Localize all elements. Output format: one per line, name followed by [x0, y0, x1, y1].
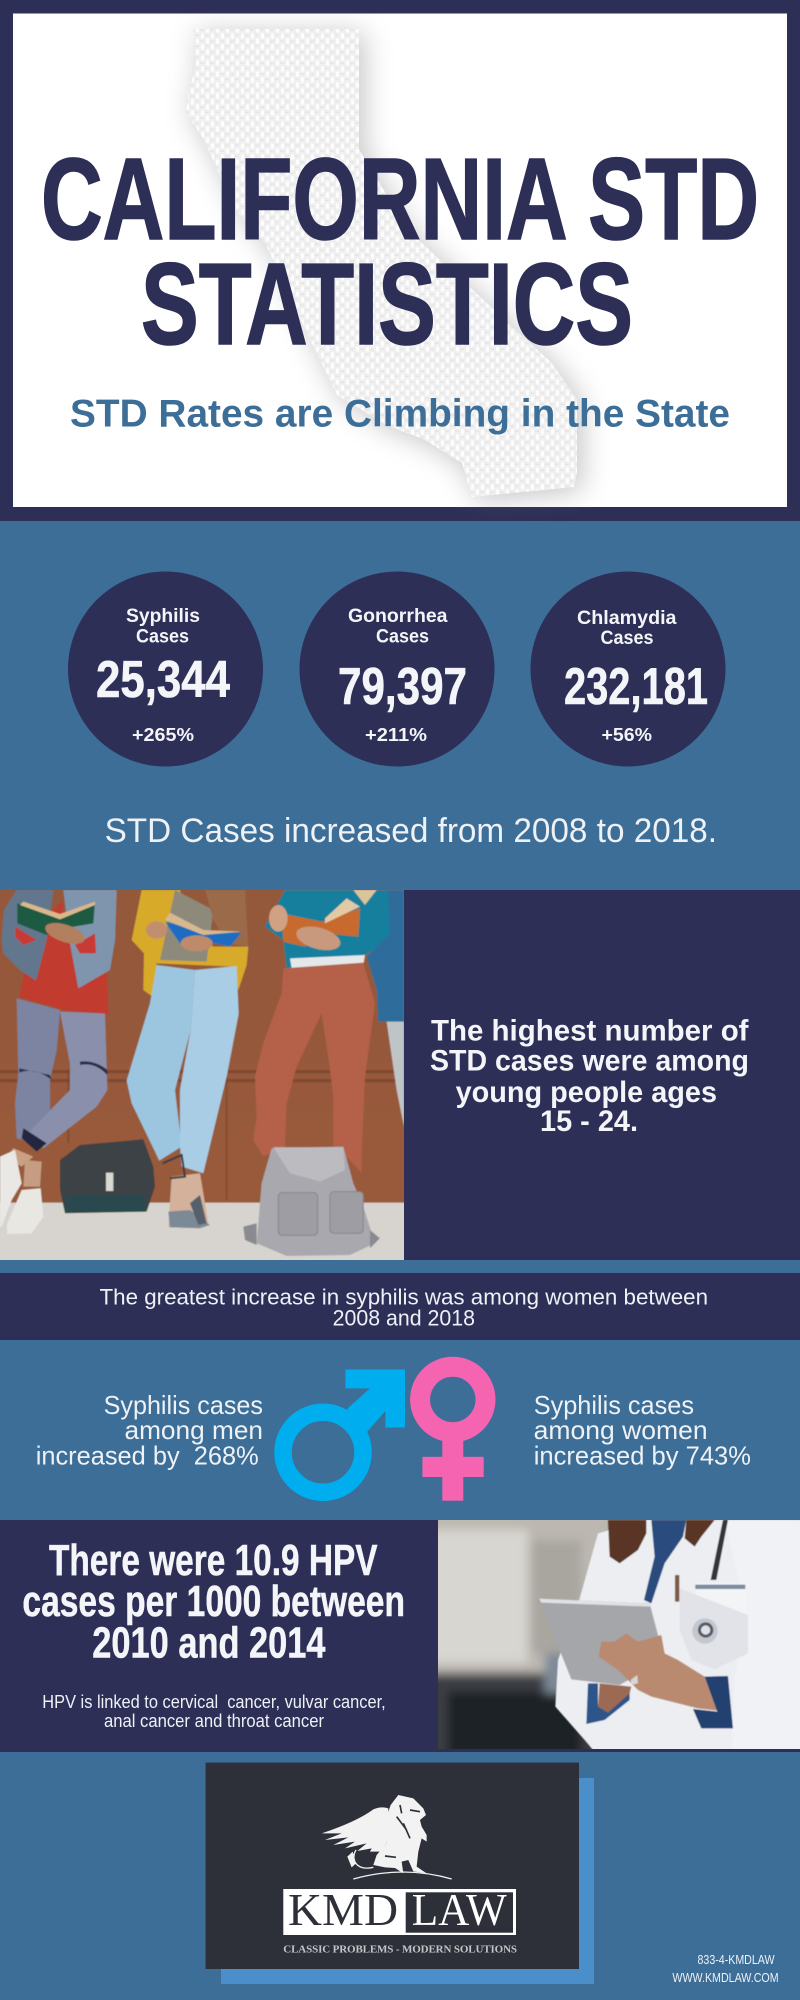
logo shadow panel [221, 1778, 594, 1984]
photo: students reading against a wall [0, 883, 413, 1267]
gray backpack [257, 1147, 375, 1256]
text: men increase: among men [124, 1415, 263, 1445]
panel: syphilis stat: +265% [132, 725, 194, 745]
panel: chlamydia stat: 232,181 [564, 658, 708, 716]
text: women increase: Syphilis cases [534, 1390, 694, 1420]
panel: KMD Law logo [206, 1763, 579, 1969]
panel: highest number of cases: 15 - 24. [540, 1105, 638, 1138]
panel: greatest increase band: 2008 and 2018 [333, 1306, 475, 1331]
text: women increase: increased by 743% [534, 1440, 751, 1470]
contact details: 833-4-KMDLAW [698, 1952, 775, 1967]
panel: chlamydia stat: +56% [602, 725, 652, 745]
icon: California map [186, 29, 582, 501]
panel: HPV statistic: HPV is linked to cervical cancer, vulvar cancer, [42, 1692, 386, 1712]
middle person [132, 890, 248, 998]
title: STATISTICS [141, 239, 633, 369]
panel: chlamydia stat: Cases [600, 628, 654, 649]
text: men increase [36, 1390, 263, 1470]
wordmark: LAW [412, 1884, 507, 1935]
contact details [672, 1952, 779, 1985]
panel: HPV statistic: anal cancer and throat cancer [104, 1711, 324, 1731]
panel: chlamydia stat: Chlamydia [577, 608, 677, 629]
tagline: CLASSIC PROBLEMS - MODERN SOLUTIONS [283, 1944, 517, 1956]
panel: syphilis stat: 25,344 [96, 651, 230, 709]
panel: highest number of cases: young people ages [456, 1076, 717, 1109]
title [41, 134, 759, 369]
text: men increase: increased by 268% [36, 1440, 259, 1470]
panel: syphilis stat: Cases [136, 626, 189, 648]
icon: male symbol [283, 1370, 405, 1492]
subtitle: STD Rates are Climbing in the State [70, 392, 730, 436]
panel: highest number of cases: STD cases were among [430, 1045, 749, 1078]
contact details: WWW.KMDLAW.COM [672, 1970, 779, 1985]
photo: doctor holding a tablet [438, 1520, 800, 1749]
panel: gonorrhea stat: 79,397 [338, 658, 467, 716]
dark backpack [60, 1139, 155, 1213]
text: women increase: among women [534, 1415, 708, 1445]
panel: gonorrhea stat: Gonorrhea [348, 606, 448, 627]
panel: gonorrhea stat: +211% [365, 725, 427, 745]
wordmark: KMD [288, 1884, 398, 1935]
panel: highest number of cases [404, 890, 800, 1260]
panel: HPV statistic: 2010 and 2014 [92, 1618, 326, 1667]
panel: title header [0, 0, 800, 521]
panel: gonorrhea stat [300, 572, 494, 766]
panel: greatest increase band: The greatest increase in syphilis was among women between [100, 1284, 708, 1309]
panel: syphilis stat [68, 572, 263, 766]
wordmark [283, 1884, 516, 1935]
panel: chlamydia stat [530, 572, 726, 766]
panel: greatest increase band [0, 1273, 800, 1340]
icon: winged lion [322, 1795, 452, 1879]
right person [265, 890, 391, 968]
text: men increase: Syphilis cases [104, 1390, 263, 1420]
panel: HPV statistic: There were 10.9 HPV [49, 1536, 378, 1585]
panel: HPV statistic: cases per 1000 between [22, 1577, 405, 1626]
panel: HPV statistic [0, 1520, 800, 1752]
panel: gonorrhea stat: Cases [376, 626, 429, 648]
left person [15, 998, 60, 1143]
caption: STD cases increased: STD Cases increased from 2008 to 2018. [105, 812, 717, 850]
text: women increase [534, 1390, 751, 1470]
icon: female symbol [420, 1367, 485, 1501]
panel: syphilis stat: Syphilis [126, 606, 200, 627]
panel: highest number of cases: The highest number of [431, 1014, 749, 1048]
